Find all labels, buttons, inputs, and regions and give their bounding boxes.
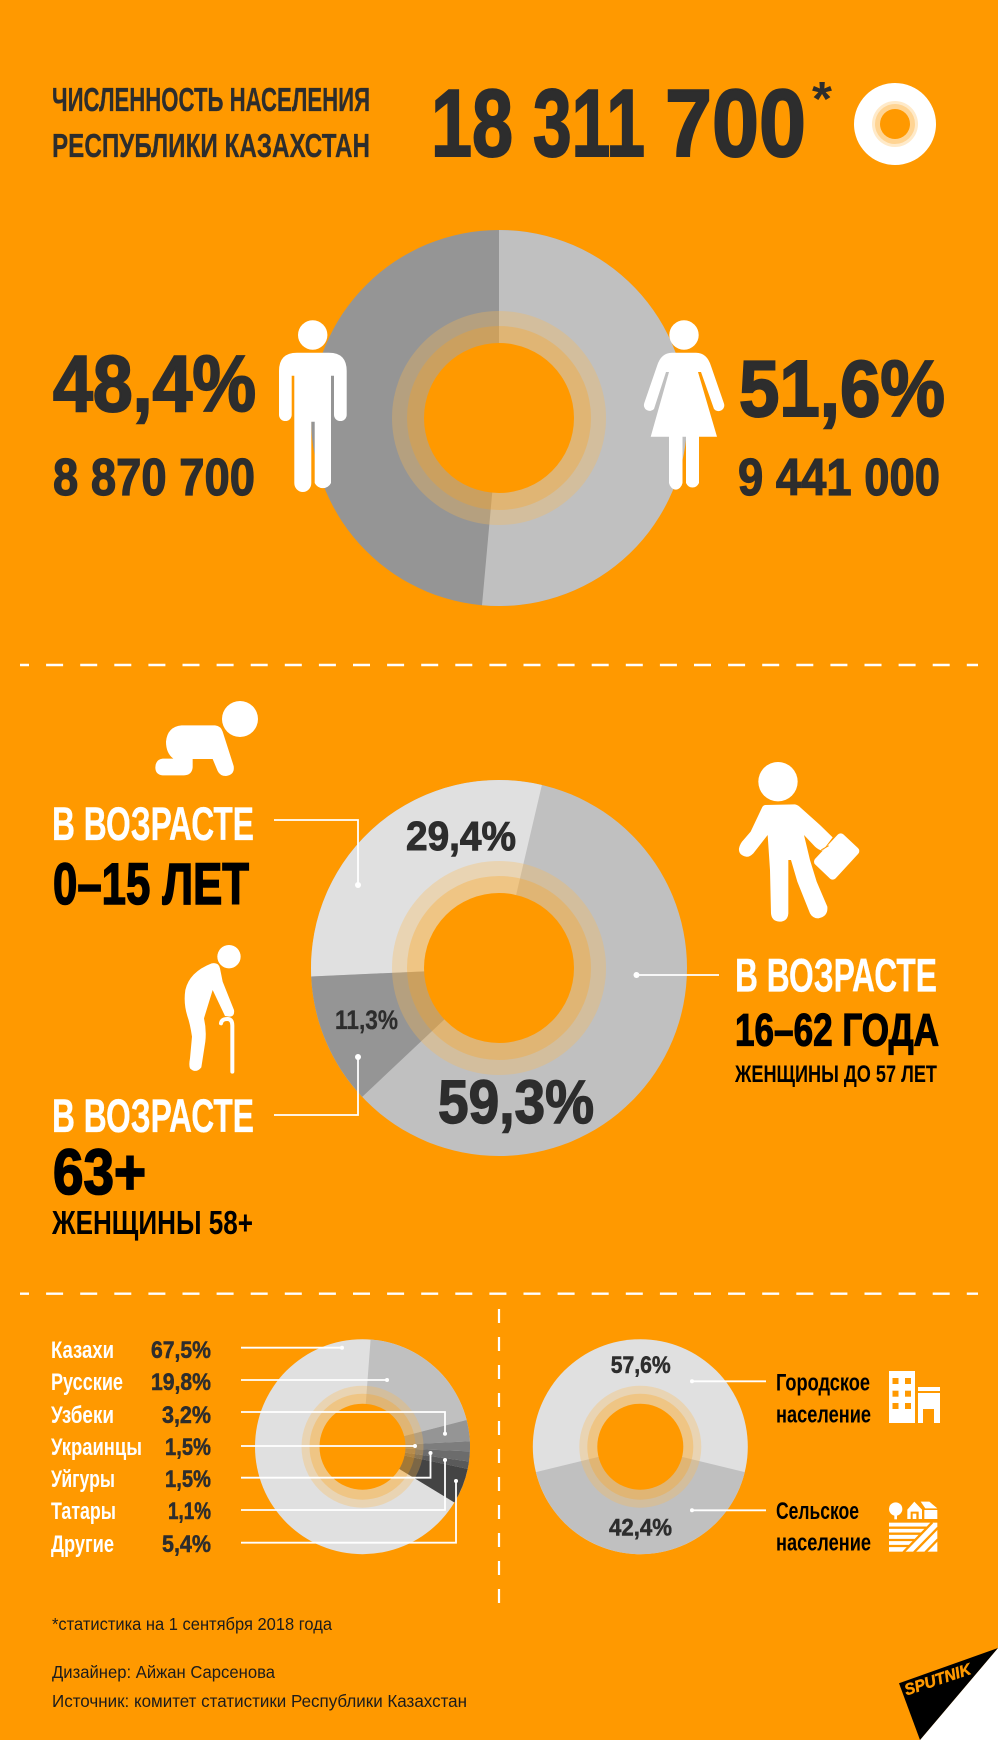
credits: Дизайнер: Айжан Сарсенова: [52, 1662, 275, 1682]
leader: age 16-62: [634, 972, 719, 978]
label: age 16-62: [734, 948, 939, 1088]
legend: ethnic group values: 1,5%: [165, 1434, 211, 1461]
women share: [738, 344, 945, 507]
label: urban population: [776, 1370, 871, 1428]
label: rural population: население: [776, 1530, 871, 1557]
logo: Sputnik corner: [899, 1648, 998, 1740]
leader: rural: [690, 1508, 766, 1512]
legend: ethnic group names: Украинцы: [51, 1434, 142, 1461]
label: age 63+: В ВОЗРАСТЕ: [52, 1089, 254, 1142]
title: [52, 81, 370, 164]
leader: urban: [690, 1379, 766, 1383]
label: age 0-15: [52, 797, 254, 917]
title: ЧИСЛЕННОСТЬ НАСЕЛЕНИЯ: [52, 81, 370, 118]
icon: worker with briefcase: [739, 762, 855, 922]
total population number: [431, 70, 832, 177]
footnote: *статистика на 1 сентября 2018 года: [52, 1614, 332, 1634]
value: 59.3: 59,3%: [438, 1068, 594, 1136]
total population number: 18: [431, 70, 513, 177]
women share: 51,6%: [739, 344, 945, 433]
icon: crawling baby: [155, 701, 258, 776]
icon: elderly person with cane: [185, 945, 241, 1072]
label: age 0-15: 0–15 ЛЕТ: [53, 852, 249, 917]
leader: age 63+: [274, 1054, 361, 1115]
label: age 0-15: В ВОЗРАСТЕ: [52, 797, 254, 850]
chart: age donut: [311, 780, 687, 1156]
chart: ethnic groups donut: [255, 1339, 470, 1554]
label: rural population: Сельское: [776, 1498, 859, 1525]
men share: 8 870 700: [53, 449, 255, 507]
icon: village and fields: [889, 1502, 938, 1552]
total population number: 311: [533, 70, 645, 177]
legend: ethnic group names: [51, 1337, 142, 1558]
credits: Источник: комитет статистики Республики Казахстан: [52, 1691, 467, 1711]
legend: ethnic group names: Узбеки: [51, 1402, 114, 1429]
icon: ring: [854, 83, 936, 165]
leaders: ethnic groups: [241, 1346, 458, 1543]
legend: ethnic group values: 5,4%: [162, 1531, 211, 1558]
credits: [52, 1662, 467, 1711]
icon: man: [279, 320, 347, 492]
legend: ethnic group values: 1,5%: [165, 1466, 211, 1493]
legend: ethnic group values: [151, 1337, 211, 1558]
value: rural: 42,4%: [609, 1515, 672, 1542]
label: age 63+: ЖЕНЩИНЫ 58+: [51, 1204, 253, 1241]
legend: ethnic group names: Казахи: [51, 1337, 114, 1364]
legend: ethnic group names: Другие: [51, 1531, 114, 1558]
value: urban: 57,6%: [611, 1352, 671, 1379]
label: age 16-62: 16–62 ГОДА: [735, 1004, 939, 1056]
label: urban population: Городское: [776, 1370, 870, 1397]
legend: ethnic group names: Русские: [51, 1369, 123, 1396]
legend: ethnic group names: Уйгуры: [51, 1466, 115, 1493]
icon: city buildings: [889, 1371, 940, 1423]
value: 29.4: 29,4%: [406, 813, 516, 859]
legend: ethnic group names: Татары: [51, 1498, 116, 1525]
label: age 63+: 63+: [53, 1136, 146, 1208]
label: age 16-62: ЖЕНЩИНЫ ДО 57 ЛЕТ: [734, 1061, 937, 1088]
total population number: *: [812, 73, 832, 126]
men share: [53, 339, 256, 507]
women share: 9 441 000: [738, 449, 940, 507]
label: urban population: население: [776, 1401, 871, 1428]
icon: woman: [644, 320, 724, 490]
total population number: 700: [665, 70, 806, 177]
label: age 63+: [51, 1089, 254, 1241]
legend: ethnic group values: 67,5%: [151, 1337, 211, 1364]
chart: urban and rural donut: [533, 1339, 748, 1554]
legend: ethnic group values: 3,2%: [162, 1402, 211, 1429]
chart: gender donut: [311, 230, 687, 606]
legend: ethnic group values: 1,1%: [168, 1498, 211, 1525]
leader: age 0-15: [274, 820, 361, 888]
men share: 48,4%: [53, 339, 256, 428]
legend: ethnic group values: 19,8%: [151, 1369, 211, 1396]
value: 11.3: 11,3%: [335, 1005, 398, 1035]
title: РЕСПУБЛИКИ КАЗАХСТАН: [52, 127, 370, 164]
logo: Sputnik corner: SPUTNIK: [902, 1661, 975, 1699]
label: rural population: [776, 1498, 871, 1557]
